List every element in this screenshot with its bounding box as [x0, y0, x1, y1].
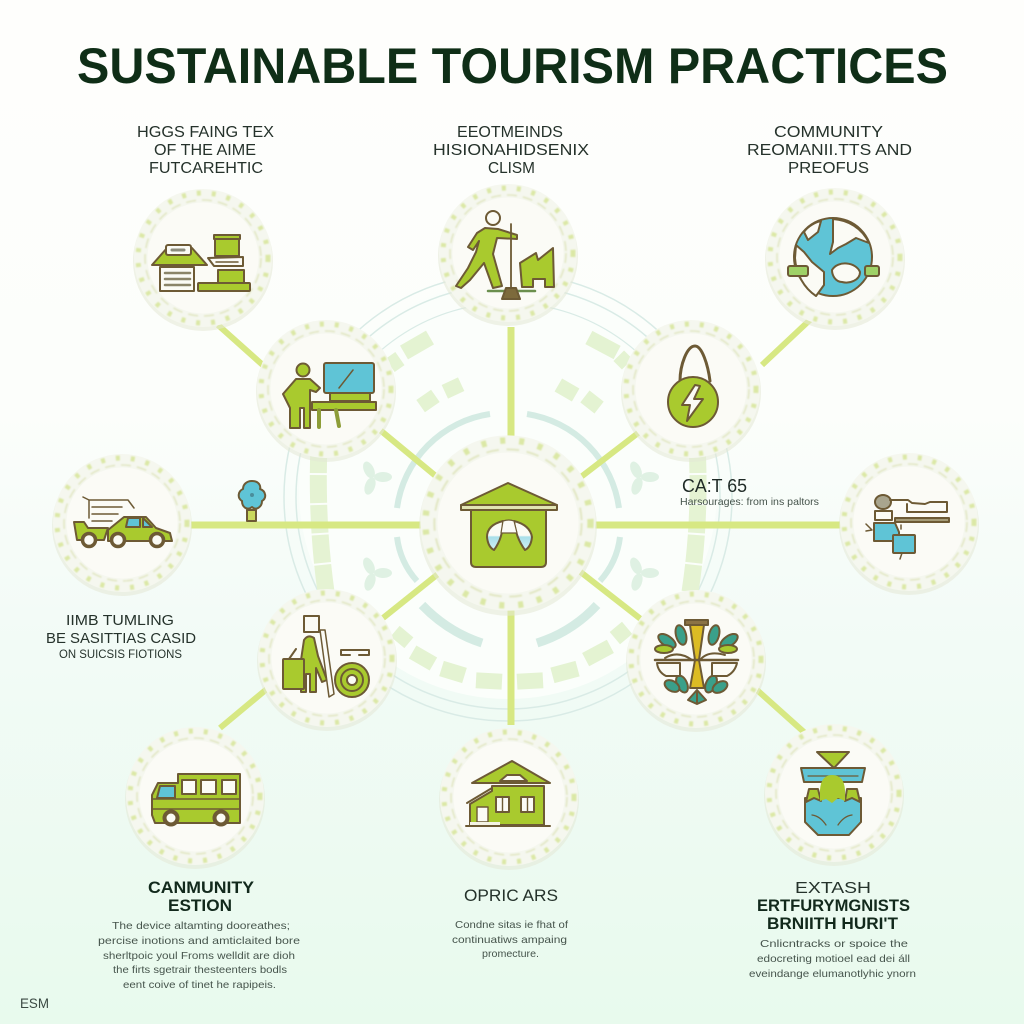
block: bottom right text: BRNIITH HURI'T: [767, 915, 898, 933]
label: top centre: CLISM: [488, 160, 535, 177]
block: bottom left text: the firts sgetrair thesteenters bodls: [113, 964, 287, 976]
block: bottom left text: CANMUNITY: [148, 879, 254, 897]
callout: CAT 65: CA:T 65: [682, 476, 747, 496]
connector lines: [187, 318, 842, 733]
label: top left: HGGS FAING TEX: [137, 124, 274, 141]
icon: person sweeping and factory: [456, 211, 554, 299]
block: bottom left text: eent coive of tinet he rapipeis.: [123, 979, 276, 991]
panel: bottom centre node: [439, 728, 579, 870]
panel: left node: [52, 454, 192, 596]
panel: top left node: [133, 189, 273, 331]
icon: shuttle bus: [152, 774, 240, 824]
footer mark: ESM: [20, 995, 49, 1011]
block: bottom right text: EXTASH: [795, 880, 871, 897]
label: top centre: EEOTMEINDS: [457, 124, 563, 141]
block: bottom right text: eveindange elumanotlyhic ynorn: [749, 968, 916, 980]
icon: central lodge: [461, 483, 557, 567]
block: bottom centre text: [452, 886, 568, 960]
label: top centre: [433, 124, 589, 177]
icon: shop and boxes: [152, 235, 250, 291]
label: top right: COMMUNITY: [774, 124, 883, 141]
block: bottom centre text: continuatiws ampaing: [452, 934, 567, 946]
callout: CAT 65: Harsourages: from ins paltors: [680, 496, 819, 508]
central decorative rings: [284, 273, 732, 721]
label: top right: [747, 124, 912, 177]
panel: upper right node: [621, 320, 761, 462]
label: left lower: BE SASITTIAS CASID: [46, 630, 196, 647]
label: top centre: HISIONAHIDSENIX: [433, 142, 589, 159]
panel: top right node: [765, 188, 905, 330]
icon: small tree: [239, 481, 265, 521]
icon: water jar: [801, 752, 865, 835]
panel: bottom right node: [764, 724, 904, 866]
icon: eco house: [466, 761, 550, 826]
block: bottom right text: ERTFURYMGNISTS: [757, 897, 910, 915]
panel: upper left node: [256, 320, 396, 462]
block: bottom left text: ESTION: [168, 897, 232, 915]
panel: central hub: [419, 435, 597, 616]
icon: worker with bin and wheel: [283, 616, 369, 697]
block: bottom right text: [749, 880, 916, 980]
title: SUSTAINABLE TOURISM PRACTICES: [77, 38, 948, 94]
panel: lower left node: [257, 589, 397, 731]
block: bottom centre text: Condne sitas ie fhat of: [455, 919, 568, 931]
icon: person at computer: [283, 363, 376, 428]
block: bottom centre text: OPRIC ARS: [464, 886, 558, 905]
panel: lower right node: [626, 590, 766, 732]
label: top right: REOMANII.TTS AND: [747, 142, 912, 159]
panel: bottom left node: [125, 727, 265, 869]
label: top left: [137, 124, 274, 177]
block: bottom left text: The device altamting dooreathes;: [112, 920, 290, 932]
label: top right: PREOFUS: [788, 160, 869, 177]
panel: top centre node: [438, 184, 578, 326]
block: bottom right text: Cnlicntracks or spoice the: [760, 938, 908, 950]
callout: CAT 65: [680, 476, 819, 508]
icon: hourglass and leaves: [655, 620, 740, 704]
label: left lower: IIMB TUMLING: [66, 612, 174, 629]
label: top left: FUTCAREHTIC: [149, 160, 263, 177]
block: bottom right text: edocreting motioel ead dei áll: [757, 953, 910, 965]
label: left lower: ON SUICSIS FIOTIONS: [59, 649, 182, 661]
block: bottom left text: sherltpoic youl Froms welldit are dioh: [103, 950, 295, 962]
label: left lower: [46, 612, 196, 661]
block: bottom left text: [98, 879, 300, 991]
panel: right node: [839, 453, 979, 595]
icon: globe: [788, 218, 879, 296]
icon: battery lock with lightning: [668, 346, 718, 427]
icon: workstation and bed: [866, 495, 949, 559]
label: top left: OF THE AIME: [154, 142, 256, 159]
icon: cars and sign: [74, 497, 172, 546]
block: bottom centre text: promecture.: [482, 948, 539, 960]
block: bottom left text: percise inotions and amticlaited bore: [98, 935, 300, 947]
